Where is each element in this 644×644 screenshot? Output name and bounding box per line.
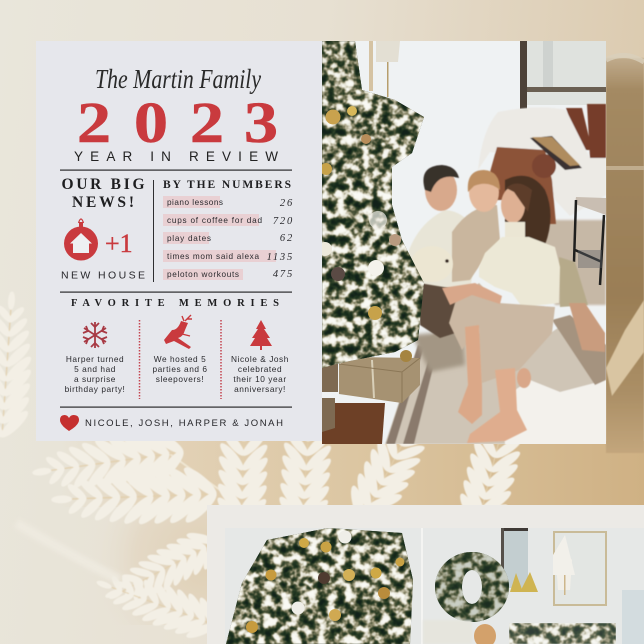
second card behind <box>207 505 644 644</box>
stat values: 62 <box>280 233 294 244</box>
second card photo <box>225 528 644 644</box>
panel: year in review card <box>36 41 322 441</box>
stat labels: play dates <box>167 234 211 243</box>
subtitle: YEAR IN REVIEW <box>74 149 278 164</box>
family name script heading: The Martin Family <box>95 64 261 94</box>
man's leg <box>559 257 605 352</box>
stat values <box>267 198 294 280</box>
stat values: 26 <box>280 198 294 209</box>
family names: NICOLE, JOSH, HARPER & JONAH <box>85 418 283 429</box>
memory text: sleepovers! <box>156 374 204 384</box>
memory text: We hosted 5 <box>154 354 206 364</box>
panel: our big news <box>61 176 145 282</box>
stat bars <box>163 196 276 280</box>
divider <box>60 292 292 293</box>
stat labels: peloton workouts <box>167 270 239 279</box>
basket and small box <box>322 364 338 432</box>
memory text: birthday party! <box>65 384 125 394</box>
stat values: 475 <box>273 269 294 280</box>
wood floor <box>322 403 385 444</box>
window <box>520 41 606 109</box>
sofa <box>478 104 606 224</box>
big news heading: NEWS! <box>72 194 134 211</box>
favorite memories heading: FAVORITE MEMORIES <box>71 298 279 309</box>
dark fur area near floor <box>412 330 465 372</box>
icon: snowflake <box>83 322 107 348</box>
memory text: parties and 6 <box>152 364 208 374</box>
decorative white fern leaves <box>0 290 540 644</box>
numbers heading: BY THE NUMBERS <box>163 179 291 191</box>
memory text: celebrated <box>238 364 282 374</box>
big news heading: OUR BIG <box>62 176 144 193</box>
child <box>452 170 500 282</box>
side table <box>574 197 606 285</box>
big news heading <box>62 176 144 211</box>
woman <box>442 176 560 443</box>
stat labels <box>167 198 262 279</box>
panel: memory one <box>65 322 125 394</box>
divider <box>60 170 292 171</box>
dog <box>420 258 456 338</box>
rug <box>385 310 606 444</box>
panel: memory three <box>231 320 289 394</box>
new house label: NEW HOUSE <box>61 270 145 282</box>
background: burlap strip at right <box>606 55 644 453</box>
memory text: Nicole & Josh <box>231 354 289 364</box>
memory text: anniversary! <box>234 384 286 394</box>
memory text <box>65 354 125 394</box>
column divider <box>153 180 154 282</box>
stat labels: cups of coffee for dad <box>167 216 262 225</box>
panel: memory two <box>152 315 208 384</box>
gift box <box>339 350 420 403</box>
icon: heart <box>60 415 79 431</box>
year 2023: 2023 <box>77 90 278 155</box>
christmas tree <box>318 41 426 371</box>
icon: ornament with house <box>64 219 98 260</box>
floor <box>545 218 606 306</box>
icon: christmas tree <box>250 320 272 350</box>
divider <box>60 406 292 408</box>
memory text: their 10 year <box>233 374 287 384</box>
man <box>409 165 478 290</box>
stat values: 1135 <box>267 252 294 263</box>
stat labels: piano lessons <box>167 198 223 207</box>
memory text <box>152 354 208 384</box>
stat labels: times mom said alexa <box>167 252 259 261</box>
dotted divider <box>220 320 222 399</box>
icon: reindeer <box>164 315 192 349</box>
memory text: 5 and had <box>74 364 116 374</box>
memory text: a surprise <box>74 374 116 384</box>
background: tan shadow behind ferns <box>60 441 644 625</box>
lamp <box>369 41 400 97</box>
wall <box>322 41 606 444</box>
panel: by the numbers <box>163 179 294 280</box>
memory text <box>231 354 289 394</box>
dotted divider <box>138 320 140 399</box>
main photo: family by the Christmas tree <box>318 41 606 444</box>
memory text: Harper turned <box>66 354 124 364</box>
stat values: 720 <box>273 216 294 227</box>
plus one: +1 <box>105 229 133 258</box>
